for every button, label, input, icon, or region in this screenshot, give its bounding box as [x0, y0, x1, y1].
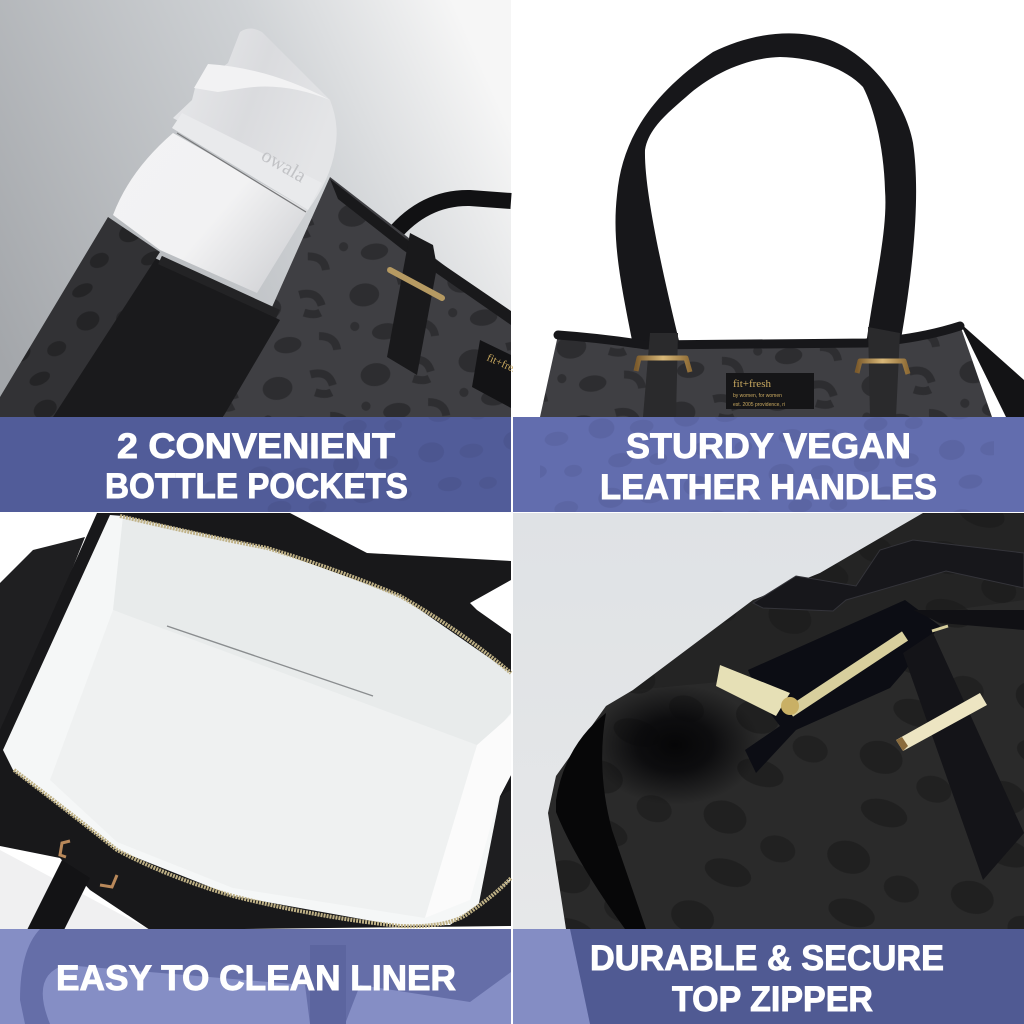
bag outer shell and back handles [0, 513, 511, 930]
zippers [14, 516, 511, 926]
heading: bottle pockets: 2 CONVENIENT [117, 427, 395, 466]
gold buckle [896, 693, 987, 751]
leather handles [615, 33, 916, 345]
banner [513, 417, 1024, 512]
black shadow in gusset [590, 685, 760, 805]
panel: top zipper [513, 513, 1024, 1024]
top darker fabric [633, 513, 1024, 690]
brand label [726, 373, 814, 409]
heading: zipper: TOP ZIPPER [672, 980, 873, 1019]
right strap [868, 327, 900, 417]
side pocket fabric [0, 217, 160, 417]
front handle [27, 860, 90, 930]
mesh pocket [50, 258, 280, 417]
banner [513, 929, 1024, 1024]
panel: vegan leather handles [513, 0, 1024, 512]
heading: zipper: DURABLE & SECURE [590, 939, 944, 978]
second strap [913, 610, 1024, 630]
icon: water bottle [113, 28, 337, 293]
left mesh pocket [0, 537, 85, 735]
heading: handles: STURDY VEGAN [626, 427, 911, 466]
side strap [903, 633, 1024, 880]
brand label [472, 340, 525, 408]
top handle [753, 540, 1024, 611]
heading: handles: LEATHER HANDLES [600, 468, 937, 507]
brand label: by women, for women [733, 393, 782, 399]
buckle end [896, 737, 908, 751]
heading: handles [600, 427, 937, 507]
gold buckles [636, 358, 908, 374]
bag leather trim [330, 179, 511, 325]
brand label: fit+fresh [733, 378, 771, 390]
brand label: fit+fresh [485, 352, 525, 378]
zipper tape behind strap [932, 626, 948, 631]
panel: bottle pockets [0, 0, 525, 512]
banner strap centre [310, 945, 346, 1024]
white liner [3, 515, 511, 926]
liner fold crease [167, 626, 373, 696]
zipper pull [716, 665, 799, 716]
bag body [548, 513, 1024, 929]
panel: easy to clean liner [0, 513, 511, 1024]
heading: bottle pockets [105, 427, 408, 506]
strap on the right side [960, 323, 1024, 417]
front buckle rings [60, 841, 117, 887]
bag body [540, 325, 992, 417]
floor shade [0, 850, 150, 930]
banner [0, 929, 511, 1024]
icon: water bottle: owala [258, 144, 310, 187]
dark inner edge [556, 713, 646, 929]
handle behind bag [393, 198, 511, 235]
banner over bag [570, 929, 1024, 1024]
pocket binding [160, 260, 278, 314]
bag body with leopard print [223, 177, 511, 417]
right outer side [478, 790, 511, 908]
heading: liner: EASY TO CLEAN LINER [56, 959, 456, 998]
banner shadow of bag and straps [20, 929, 511, 1024]
heading: bottle pockets: BOTTLE POCKETS [105, 467, 408, 506]
handle strap [387, 233, 437, 375]
bag rim [558, 326, 960, 345]
back wall of the liner [113, 516, 511, 753]
brand label: est. 2005 providence, ri [733, 402, 785, 408]
right liner wall [425, 715, 511, 918]
gold zipper tape [790, 636, 905, 712]
zipper opening [745, 600, 940, 773]
left strap [643, 333, 678, 417]
liner floor [50, 610, 477, 918]
banner print [195, 417, 511, 512]
banner print [540, 417, 994, 512]
banner [0, 417, 511, 512]
heading: zipper [590, 939, 944, 1019]
gold buckle [390, 270, 442, 298]
side gusset [556, 697, 796, 929]
